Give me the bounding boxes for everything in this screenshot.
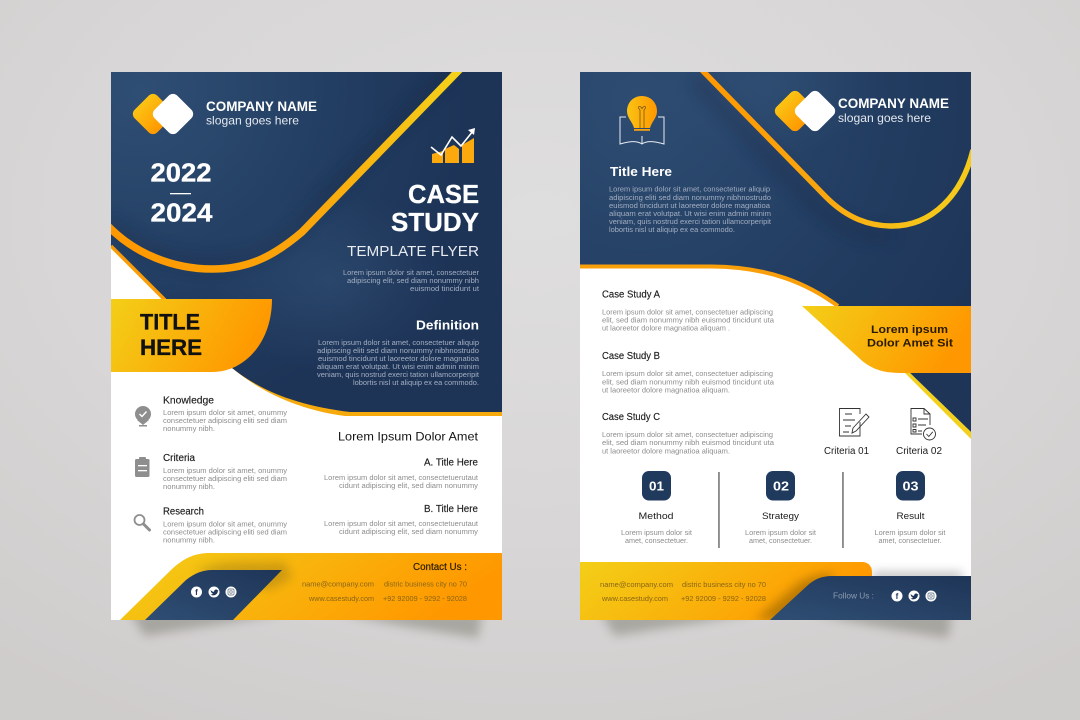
icon: research magnifier	[134, 515, 150, 530]
item: B title: cidunt adipiscing elit, sed diam nonummy	[339, 529, 479, 536]
divider	[718, 472, 720, 548]
step 02: strategy: 02	[773, 478, 789, 494]
step 02: strategy	[745, 471, 816, 545]
shadow along swoosh	[698, 84, 809, 196]
banner text: Lorem ipsum	[871, 324, 948, 336]
item: criteria: consectetuer adipiscing eliti sed diam	[163, 476, 287, 483]
item: case study A: ut laoreetor dolore magnatioa aliquam .	[602, 326, 730, 332]
text: title body: veniam, quis nostrud exerci tation ullamcorperipit	[609, 219, 771, 226]
icon: criteria 02 checklist	[911, 408, 936, 440]
glow in lower navy area	[280, 241, 393, 326]
navy corner triangle	[910, 373, 971, 432]
step 01: method: amet, consectetuer.	[625, 538, 688, 545]
heading: case study	[347, 179, 479, 260]
step 01: method	[621, 471, 692, 545]
heading: case study: TEMPLATE FLYER	[347, 243, 479, 260]
item: research: Research	[163, 507, 204, 518]
footer navy	[770, 576, 971, 620]
item: knowledge: nonummy nibh.	[163, 426, 215, 433]
company name: left: COMPANY NAME	[206, 99, 317, 114]
heading: case study: STUDY	[391, 207, 479, 237]
logo: right	[772, 88, 838, 134]
shadow along swoosh	[116, 218, 302, 258]
text: title body: Lorem ipsum dolor sit amet, consectetuer aliquip	[609, 187, 770, 194]
item: research: Lorem ipsum dolor sit amet, onummy	[163, 522, 288, 528]
contact block: right: +92 92009 - 9292 - 92028	[681, 594, 766, 603]
orange diagonal edge	[111, 246, 165, 300]
item: knowledge: Lorem ipsum dolor sit amet, onummy	[163, 410, 288, 417]
yellow swoosh	[106, 68, 461, 269]
company name: left: slogan goes here	[206, 114, 299, 128]
item: A title	[324, 457, 479, 490]
right flyer paper	[580, 268, 971, 576]
footer shadow on navy	[755, 574, 835, 620]
left flyer paper	[111, 248, 502, 620]
icon: criteria clipboard	[135, 457, 150, 477]
icon: criteria 01 document and pen	[840, 408, 869, 436]
item: A title: A. Title Here	[424, 457, 478, 468]
contact block: left: www.casestudy.com	[308, 594, 374, 603]
footer navy parallelogram	[145, 570, 282, 620]
heading: definition: Definition	[416, 318, 479, 332]
title banner: HERE	[140, 335, 202, 360]
item: case study B	[602, 351, 774, 394]
step 01: method: 01	[649, 478, 664, 494]
title banner	[111, 299, 272, 372]
text: intro: adipiscing elit, sed diam nonummy nibh	[347, 278, 479, 285]
footer band	[120, 553, 502, 620]
step 01: method: Lorem ipsum dolor sit	[621, 530, 692, 537]
item: knowledge: consectetuer adipiscing eliti sed diam	[163, 418, 287, 425]
icon: knowledge pin	[135, 406, 151, 426]
contact block: left: +92 92009 - 9292 - 92028	[383, 594, 467, 603]
text: definition: Lorem ipsum dolor sit amet, consectetuer aliquip	[318, 340, 479, 347]
contact block: right: name@company.com	[600, 580, 673, 589]
step 01: method: Method	[638, 511, 674, 522]
icons: social left	[191, 586, 236, 598]
panel: left flyer	[106, 68, 502, 620]
item: A title: cidunt adipiscing elit, sed diam nonummy	[339, 483, 479, 490]
panel: right flyer	[580, 15, 973, 620]
item: research: nonummy nibh.	[163, 538, 215, 544]
heading: case study: CASE	[408, 179, 479, 209]
step 03: result: 03	[902, 478, 918, 494]
contact block: left: Contact Us :	[413, 562, 467, 573]
step 02: strategy: Strategy	[762, 511, 799, 522]
item: knowledge: Knowledge	[163, 396, 214, 406]
navy header area	[580, 72, 971, 306]
contact block: left: distric business city no 70	[384, 580, 467, 589]
item: B title	[324, 504, 479, 536]
item: criteria: nonummy nibh.	[163, 484, 215, 491]
item: criteria	[163, 453, 288, 491]
navy header area	[111, 72, 502, 412]
icons: social right: f	[896, 592, 899, 601]
label: follow us: Follow Us :	[833, 591, 874, 601]
step 03: result	[874, 471, 946, 545]
company name: right	[838, 96, 949, 125]
text: title body	[609, 187, 771, 234]
step 03: result: Result	[896, 511, 925, 522]
item: research	[163, 507, 288, 544]
orange lower edge	[580, 266, 838, 306]
text: definition: veniam, quis nostrud exerci tation ullamcorperipit	[317, 372, 479, 379]
contact block: right: www.casestudy.com	[601, 594, 668, 603]
contact block: right: distric business city no 70	[682, 580, 766, 589]
text: title body: euismod tincidunt ut laoreetor dolore magnatioa	[609, 203, 770, 210]
item: research: consectetuer adipiscing eliti sed diam	[163, 530, 287, 536]
item: B title: B. Title Here	[424, 504, 478, 515]
text: definition: adipiscing eliti sed diam nonummy nibhnostrudo	[317, 348, 479, 355]
item: case study B: ut laoreetor dolore magnatioa aliquam.	[602, 388, 730, 394]
text: definition	[317, 340, 479, 387]
item: case study B: Lorem ipsum dolor sit amet, consectetuer adipiscing	[602, 371, 773, 378]
step 03: result: amet, consectetuer.	[878, 538, 942, 545]
item: case study A: Lorem ipsum dolor sit amet, consectetuer adipiscing	[602, 310, 773, 316]
label: criteria 02: Criteria 02	[896, 446, 942, 457]
item: case study A	[602, 290, 774, 332]
icons: social left: f	[195, 588, 198, 597]
item: case study C: Case Study C	[602, 412, 660, 423]
heading: lorem ipsum dolor amet: Lorem Ipsum Dolor Amet	[338, 430, 479, 444]
contact block: left	[302, 562, 467, 603]
text: title body: lobortis nisl ut aliquip ex ea commodo.	[609, 227, 735, 234]
lorem banner: Dolor Amet Sit	[867, 338, 953, 350]
item: case study C: Lorem ipsum dolor sit amet, consectetuer adipiscing	[602, 432, 773, 439]
text: definition: aliquam erat volutpat. Ut wisi enim admin minim	[317, 364, 479, 371]
yellow corner edge	[905, 373, 971, 439]
company name: left	[206, 99, 317, 128]
text: intro: euismod tincidunt ut	[410, 286, 479, 293]
glow above swoosh	[766, 81, 782, 88]
footer orange band	[580, 562, 872, 620]
text: definition: euismod tincidunt ut laoreetor dolore magnatioa	[318, 356, 479, 363]
step 03: result: Lorem ipsum dolor sit	[874, 530, 946, 537]
orange swoosh	[700, 68, 973, 226]
icon: growth chart	[431, 128, 475, 163]
item: case study B: elit, sed diam nonummy nibh euismod tincidunt uta	[602, 380, 774, 386]
item: A title: Lorem ipsum dolor sit amet, consectetuerutaut	[324, 475, 478, 482]
years: 2022	[150, 158, 212, 188]
icons: social right	[892, 590, 936, 602]
footer shadow	[872, 572, 962, 582]
icon: bulb and book	[620, 96, 664, 144]
item: knowledge	[163, 396, 288, 433]
item: case study B: Case Study B	[602, 351, 660, 362]
divider	[842, 472, 844, 548]
item: B title: Lorem ipsum dolor sit amet, consectetuerutaut	[324, 521, 478, 528]
item: criteria: Lorem ipsum dolor sit amet, onummy	[163, 468, 288, 475]
company name: right: COMPANY NAME	[838, 96, 949, 111]
drop shadows below flyers	[130, 612, 952, 638]
item: case study C: ut laoreetor dolore magnatioa aliquam.	[602, 448, 730, 456]
text: intro	[343, 270, 480, 293]
item: case study A: Case Study A	[602, 290, 660, 300]
years: 2024	[150, 198, 213, 228]
banner title: TITLE	[140, 310, 200, 334]
text: title body: aliquam erat volutpat. Ut wisi enim admin minim	[609, 211, 771, 218]
logo: left	[130, 91, 196, 137]
footer shadow	[195, 562, 292, 590]
company name: right: slogan goes here	[838, 111, 931, 125]
item: case study C: elit, sed diam nonummy nibh euismod tincidunt uta	[602, 440, 774, 447]
label: criteria 01: Criteria 01	[824, 446, 869, 457]
text: definition: lobortis nisl ut aliquip ex ea commodo.	[353, 380, 479, 387]
step 02: strategy: Lorem ipsum dolor sit	[745, 530, 816, 537]
step 02: strategy: amet, consectetuer.	[749, 538, 812, 545]
years	[150, 158, 213, 228]
orange lower edge of navy area	[232, 368, 502, 416]
lorem banner	[802, 306, 971, 373]
item: criteria: Criteria	[163, 453, 195, 464]
text: title body: adipiscing eliti sed diam nonummy nibhnostrudo	[609, 195, 771, 202]
contact block: right	[600, 580, 766, 603]
text: intro: Lorem ipsum dolor sit amet, consectetuer	[343, 270, 480, 277]
item: case study A: elit, sed diam nonummy nibh euismod tincidunt uta	[602, 318, 774, 324]
item: case study C	[602, 412, 774, 456]
contact block: left: name@company.com	[302, 580, 374, 589]
heading: title here: Title Here	[610, 164, 672, 179]
